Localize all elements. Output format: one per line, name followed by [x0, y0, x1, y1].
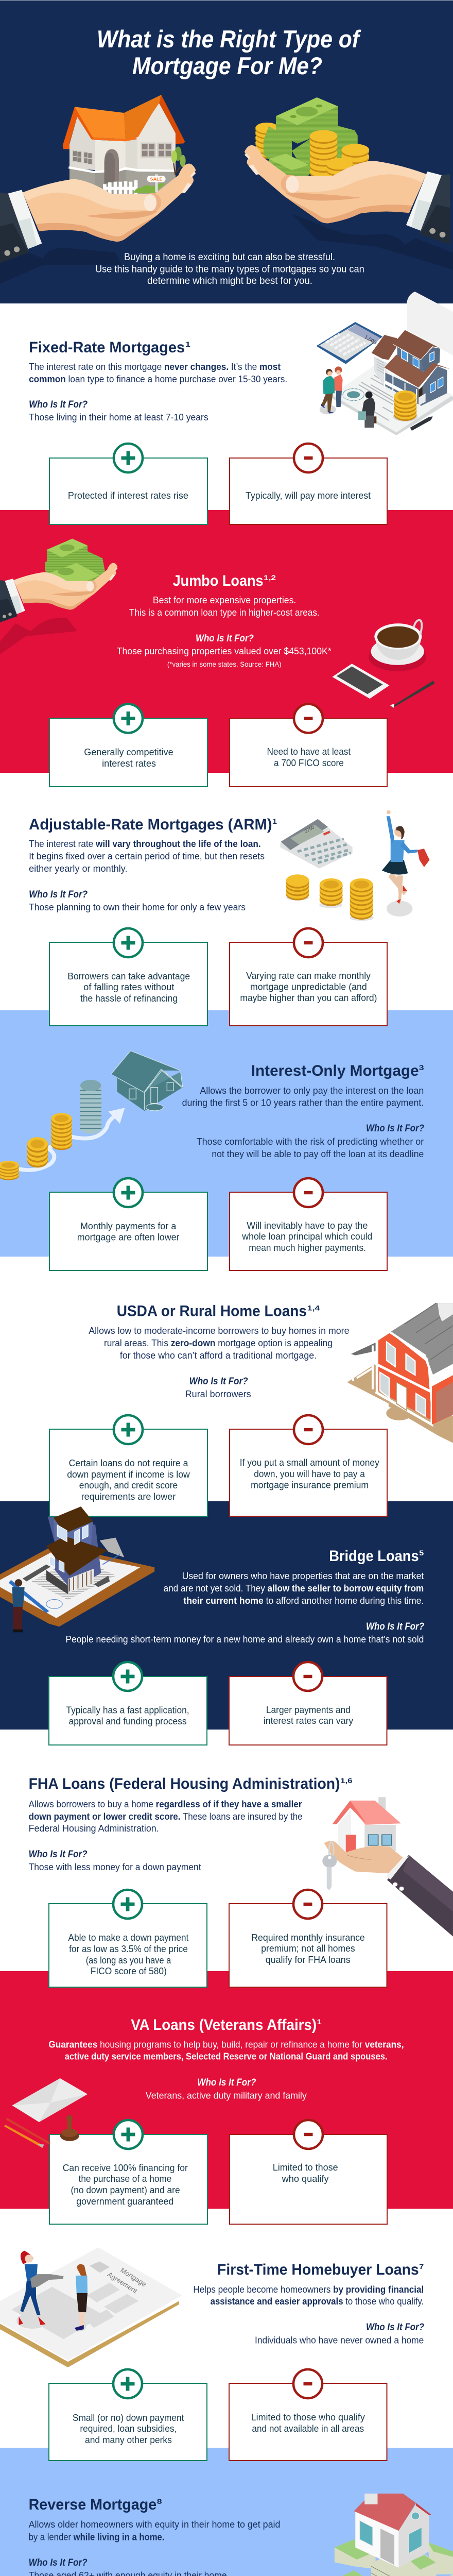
- con box: a 700 FICO score: [274, 758, 344, 768]
- pro box: Borrowers can take advantage: [67, 971, 190, 981]
- panel: first-time homebuyer loans: [0, 2247, 424, 2461]
- who is it for: not they will be able to pay off the loan at its deadline: [212, 1148, 424, 1159]
- panel: fixed-rate mortgages: [29, 292, 453, 524]
- heading: 8: [157, 2497, 162, 2505]
- heading: 7: [419, 2262, 424, 2270]
- description: [29, 1799, 303, 1834]
- description: Helps people become homeowners by providing financial: [193, 2284, 424, 2295]
- panel: adjustable-rate mortgages: [29, 810, 430, 1026]
- intro text: Use this handy guide to the many types of mortgages so you can: [95, 264, 364, 275]
- description: active duty service members, Selected Reserve or National Guard and spouses.: [65, 2050, 388, 2062]
- description: The interest rate on this mortgage never changes. It’s the most: [29, 361, 281, 372]
- heading: Jumbo Loans: [173, 572, 264, 589]
- intro text: Buying a home is exciting but can also be stressful.: [124, 252, 335, 263]
- who is it for: [117, 633, 332, 668]
- pro box: and many other perks: [85, 2435, 172, 2445]
- con box: [230, 1178, 387, 1270]
- who is it for: Who Is It For?: [29, 889, 88, 900]
- con box: mortgage insurance premium: [251, 1480, 369, 1490]
- con box: and not available in all areas: [252, 2424, 364, 2434]
- pro box: the purchase of a home: [79, 2174, 171, 2184]
- con box: [229, 1890, 387, 1987]
- heading: 1,2: [264, 573, 276, 582]
- pro box: mortgage are often lower: [77, 1232, 180, 1243]
- heading: 5: [419, 1549, 424, 1557]
- who is it for: Who Is It For?: [197, 2077, 256, 2088]
- description: [29, 361, 287, 384]
- who is it for: (*varies in some states. Source: FHA): [167, 660, 282, 668]
- con box: [230, 2120, 387, 2224]
- description: and are not yet sold. They allow the seller to borrow equity from: [164, 1583, 424, 1594]
- con box: Typically, will pay more interest: [246, 490, 371, 501]
- pro box: [49, 1662, 207, 1745]
- who is it for: Veterans, active duty military and family: [146, 2090, 307, 2101]
- pro box: [49, 1415, 207, 1516]
- pro box: Generally competitive: [84, 747, 173, 757]
- pro box: [49, 928, 207, 1026]
- description: This is a common loan type in higher-cost areas.: [129, 607, 320, 618]
- panel: bridge background: [0, 1501, 453, 1730]
- pro box: (no down payment) and are: [71, 2185, 180, 2195]
- who is it for: Those comfortable with the risk of predicting whether or: [197, 1136, 424, 1147]
- title: Mortgage For Me?: [132, 52, 322, 79]
- description: [48, 2039, 404, 2062]
- heading: 1: [185, 340, 190, 348]
- description: [182, 1085, 424, 1108]
- description: common loan type to finance a home purchase over 15-30 years.: [29, 374, 287, 384]
- con box: qualify for FHA loans: [266, 1955, 351, 1965]
- con box: [229, 2369, 387, 2461]
- illustration: coins on a path to a house: [0, 1050, 183, 1180]
- panel: jumbo loans: [0, 539, 435, 787]
- pro box: Can receive 100% financing for: [63, 2163, 188, 2173]
- con box: Required monthly insurance: [251, 1933, 365, 1943]
- who is it for: Who Is It For?: [189, 1376, 248, 1387]
- description: their current home to afford another home during this time.: [183, 1595, 424, 1606]
- who is it for: Who Is It For?: [366, 1123, 424, 1134]
- pro box: enough, and credit score: [79, 1480, 178, 1490]
- pro box: approval and funding process: [69, 1716, 187, 1726]
- con box: Need to have at least: [267, 747, 351, 757]
- description: Federal Housing Administration.: [29, 1823, 159, 1834]
- con box: whole loan principal which could: [241, 1231, 372, 1242]
- description: [29, 2519, 280, 2542]
- who is it for: [29, 1849, 201, 1872]
- pro box: [49, 2369, 207, 2461]
- illustration: money in a hand: [0, 539, 117, 654]
- con box: [230, 444, 387, 524]
- illustration: barn: [347, 1303, 453, 1445]
- description: Allows borrowers to buy a home regardless of if they have a smaller: [29, 1799, 302, 1809]
- illustration: calculator, coins and woman: [280, 810, 430, 921]
- illustration: mortgage agreement book and two women: [0, 2247, 182, 2367]
- heading: FHA Loans (Federal Housing Administration): [29, 1775, 340, 1792]
- heading: Interest-Only Mortgage: [251, 1062, 419, 1079]
- who is it for: [146, 2077, 307, 2101]
- who is it for: Those living in their home at least 7-10 years: [29, 412, 208, 422]
- con box: [230, 1415, 387, 1516]
- pro box: [49, 1890, 207, 1987]
- con box: who qualify: [282, 2174, 329, 2184]
- heading: Fixed-Rate Mortgages: [29, 339, 185, 356]
- con box: interest rates can vary: [264, 1716, 353, 1726]
- pro box: [49, 1178, 207, 1270]
- description: Allows the borrower to only pay the interest on the loan: [200, 1085, 424, 1096]
- con box: [230, 704, 387, 787]
- who is it for: Who Is It For?: [196, 633, 254, 644]
- description: rural areas. This zero-down mortgage option is appealing: [104, 1337, 333, 1348]
- illustration: house in a hand: SALE: [150, 177, 163, 182]
- who is it for: Individuals who have never owned a home: [255, 2335, 424, 2345]
- intro text: [95, 252, 364, 286]
- pro box: FICO score of 580): [91, 1966, 167, 1976]
- description: [193, 2284, 424, 2307]
- illustration: envelope, pencils and stamp: [4, 2078, 88, 2148]
- illustration: coffee, phone and pen: [332, 620, 435, 708]
- pro box: [49, 444, 207, 524]
- con box: If you put a small amount of money: [240, 1458, 379, 1468]
- description: [129, 595, 320, 618]
- heading: Adjustable-Rate Mortgages (ARM): [29, 816, 272, 833]
- who is it for: [185, 1376, 251, 1399]
- con box: Limited to those who qualify: [251, 2412, 365, 2422]
- con box: maybe higher than you can afford): [240, 993, 377, 1003]
- who is it for: Who Is It For?: [29, 399, 88, 410]
- description: [164, 1570, 424, 1606]
- who is it for: Those purchasing properties valued over $453,100K*: [117, 646, 332, 656]
- heading: 1,4: [307, 1303, 320, 1312]
- description: Guarantees housing programs to help buy, build, repair or refinance a home for veterans,: [48, 2039, 404, 2049]
- description: Allows low to moderate-income borrowers to buy homes in more: [89, 1325, 350, 1336]
- who is it for: [29, 2557, 227, 2576]
- con box: premium; not all homes: [261, 1943, 355, 1954]
- heading: VA Loans (Veterans Affairs): [131, 2016, 317, 2033]
- con box: Will inevitably have to pay the: [247, 1221, 368, 1231]
- who is it for: [29, 399, 208, 422]
- panel: FHA loans: [29, 1775, 453, 1987]
- illustration: house in a hand: [0, 95, 196, 284]
- illustration: mortgage agreement book and two women: Agreement: [106, 2270, 139, 2295]
- pro box: Monthly payments for a: [80, 1221, 177, 1231]
- illustration: hand holding house and key: [322, 1797, 453, 1937]
- title: What is the Right Type of: [97, 25, 361, 53]
- heading: USDA or Rural Home Loans: [117, 1302, 307, 1320]
- description: Best for more expensive properties.: [153, 595, 296, 605]
- heading: 3: [419, 1063, 424, 1072]
- con box: down, you will have to pay a: [254, 1469, 365, 1479]
- description: The interest rate will vary throughout the life of the loan.: [29, 838, 261, 849]
- con box: Larger payments and: [266, 1705, 351, 1715]
- description: during the first 5 or 10 years rather than the entire payment.: [182, 1097, 424, 1108]
- illustration: money and coins in a hand: [245, 97, 453, 270]
- panel: reverse background: [0, 2448, 453, 2576]
- con box: Limited to those: [273, 2162, 338, 2173]
- con box: mean much higher payments.: [249, 1243, 366, 1253]
- panel: interest-only background: [0, 1010, 453, 1257]
- illustration: mortgage agreement book and two women: Mortgage: [119, 2266, 148, 2288]
- illustration: house on a clipboard: [0, 1506, 154, 1632]
- heading: 1: [317, 2018, 322, 2026]
- pro box: down payment if income is low: [67, 1469, 190, 1480]
- pro box: for as low as 3.5% of the price: [69, 1944, 188, 1954]
- description: Used for owners who have properties that are on the market: [182, 1570, 424, 1581]
- pro box: government guaranteed: [76, 2196, 173, 2207]
- pro box: required, loan subsidies,: [80, 2424, 177, 2434]
- who is it for: [65, 1621, 424, 1645]
- heading: First-Time Homebuyer Loans: [217, 2261, 419, 2278]
- heading: 1,6: [340, 1776, 353, 1785]
- panel: VA loans: [4, 2016, 404, 2224]
- description: It begins fixed over a certain period of time, but then resets: [29, 851, 265, 861]
- who is it for: Who Is It For?: [29, 2557, 88, 2568]
- illustration: paper, calculator, house, people: 1,000: [363, 334, 377, 346]
- who is it for: [255, 2321, 424, 2345]
- con box: [230, 928, 387, 1026]
- panel: jumbo background: [0, 510, 453, 773]
- title: [97, 25, 361, 79]
- pro box: Able to make a down payment: [68, 1933, 188, 1943]
- pro box: [49, 2120, 207, 2224]
- panel: VA background: [0, 1971, 453, 2209]
- who is it for: Who Is It For?: [366, 2321, 424, 2333]
- pro box: requirements are lower: [81, 1492, 176, 1502]
- description: Allows older homeowners with equity in their home to get paid: [29, 2519, 280, 2530]
- description: [29, 838, 265, 874]
- description: for those who can’t afford a traditional mortgage.: [120, 1350, 317, 1361]
- top edge strip: [0, 0, 453, 1]
- description: either yearly or monthly.: [29, 863, 127, 874]
- who is it for: [197, 1123, 424, 1159]
- pro box: the hassle of refinancing: [80, 993, 178, 1004]
- pro box: interest rates: [102, 758, 156, 769]
- who is it for: Those with less money for a down payment: [29, 1861, 201, 1872]
- panel: bridge loans: [0, 1506, 424, 1745]
- description: assistance and easier approvals to those who qualify.: [211, 2296, 424, 2307]
- illustration: house on stacks of money: [334, 2494, 453, 2576]
- description: by a lender while living in a home.: [29, 2532, 164, 2542]
- heading: 1: [272, 817, 277, 825]
- heading: Reverse Mortgage: [29, 2496, 156, 2513]
- who is it for: People needing short-term money for a new home and already own a home that’s not sold: [65, 1634, 424, 1645]
- panel: interest-only mortgage: [0, 1050, 424, 1270]
- heading: Bridge Loans: [329, 1548, 419, 1565]
- illustration: calculator, coins and woman: 3750: [304, 824, 315, 834]
- description: down payment or lower credit score. These loans are insured by the: [29, 1811, 303, 1822]
- who is it for: Who Is It For?: [366, 1621, 424, 1632]
- intro text: determine which might be best for you.: [147, 276, 312, 286]
- con box: Varying rate can make monthly: [246, 971, 371, 981]
- description: [89, 1325, 350, 1361]
- pro box: (as long as you have a: [86, 1955, 171, 1965]
- pro box: Certain loans do not require a: [69, 1458, 188, 1468]
- panel: USDA or rural home loans: [49, 1302, 453, 1516]
- panel: hero background: [0, 0, 453, 303]
- illustration: paper, calculator, house, people: [316, 292, 453, 435]
- pro box: of falling rates without: [83, 982, 174, 992]
- pro box: Typically has a fast application,: [66, 1705, 189, 1716]
- con box: mortgage unpredictable (and: [250, 982, 367, 992]
- con box: [229, 1662, 387, 1745]
- pro box: Protected if interest rates rise: [68, 490, 188, 501]
- pro box: Small (or no) down payment: [73, 2413, 184, 2423]
- who is it for: Those planning to own their home for only a few years: [29, 902, 246, 912]
- who is it for: [29, 889, 246, 912]
- who is it for: Who Is It For?: [29, 1849, 88, 1860]
- panel: hero: [0, 0, 453, 286]
- panel: reverse mortgage: [29, 2494, 453, 2576]
- who is it for: Rural borrowers: [185, 1388, 251, 1399]
- pro box: [49, 704, 207, 787]
